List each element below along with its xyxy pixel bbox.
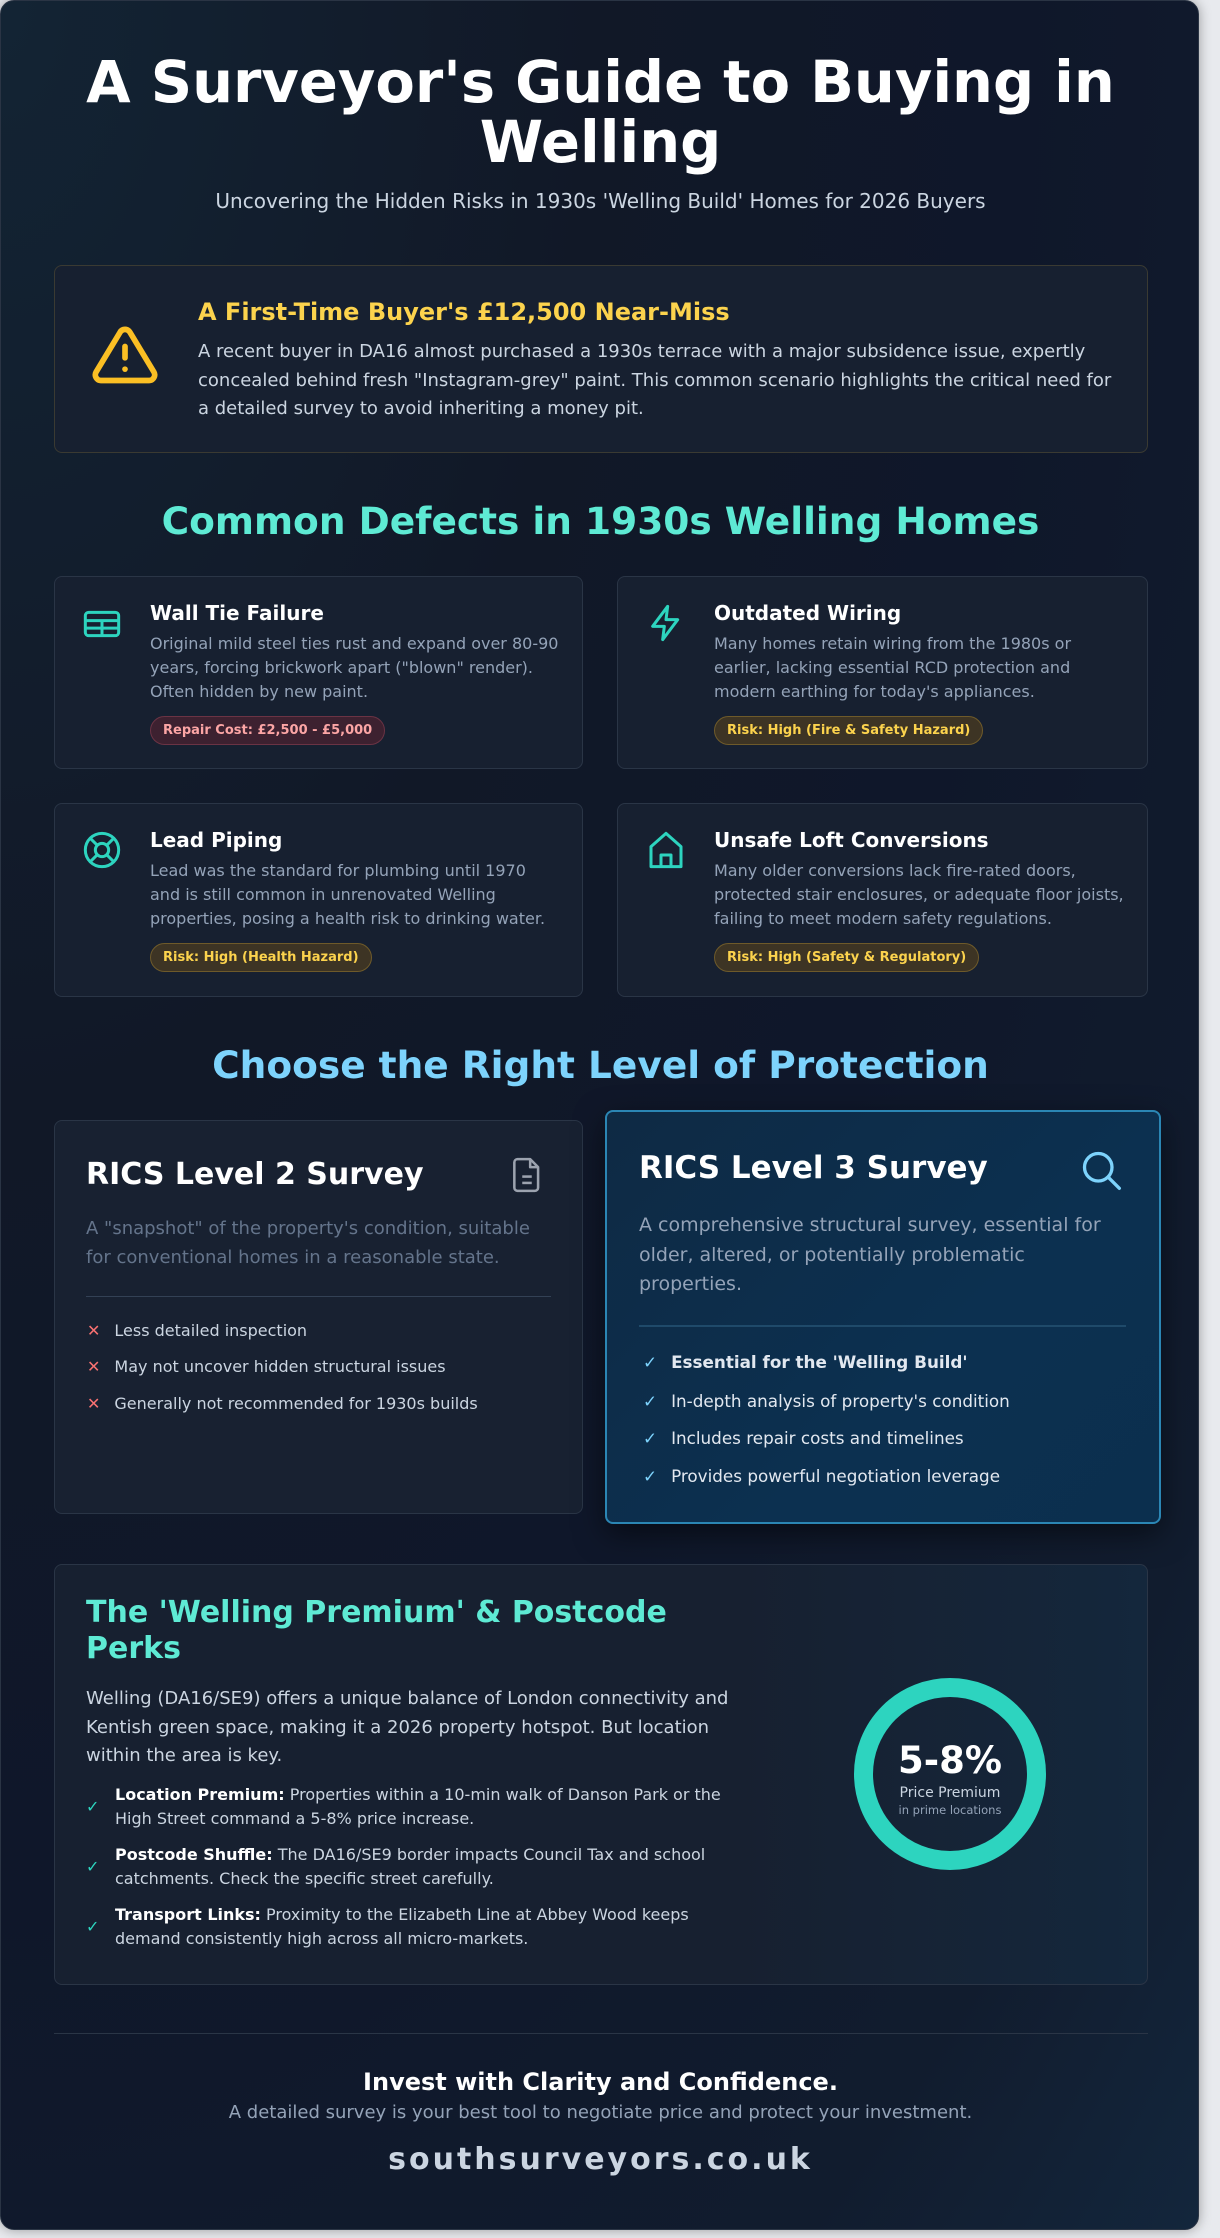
panel: RICS level 2 [54, 1120, 583, 1514]
callout heading: A First-Time Buyer's £12,500 Near-Miss [198, 298, 730, 326]
icon: bricks [84, 610, 120, 638]
premium heading: The 'Welling Premium' & Postcode Perks [86, 1595, 667, 1666]
icon: warning [92, 326, 158, 384]
title: Welling [480, 109, 721, 176]
title: A Surveyor's Guide to Buying in [86, 49, 1115, 116]
panel: lead piping [54, 803, 583, 997]
panel: RICS level 2: A "snapshot" of the property's condition, suitable for conventional homes in a reasonable state. [86, 1218, 530, 1268]
panel: lead piping: Lead was the standard for plumbing until 1970 [150, 861, 526, 880]
panel: outdated wiring: Many homes retain wiring from the 1980s or earlier, lacking essential RCD protection and modern earthing for today's appliances. [714, 634, 1071, 701]
footer text: A detailed survey is your best tool to negotiate price and protect your investment. [229, 2102, 972, 2123]
icon: lightning [651, 604, 680, 642]
panel: wall tie failure [54, 576, 583, 769]
panel: unsafe loft conversions: Risk: High (Safety & Regulatory) [727, 950, 966, 965]
heading: common defects: Common Defects in 1930s Welling Homes [162, 499, 1039, 543]
chart: price premium ring: 5-8% [898, 1739, 1002, 1782]
icon: house [650, 832, 682, 868]
panel: wall tie failure: Repair Cost: £2,500 - £5,000 [163, 723, 372, 738]
footer url: southsurveyors.co.uk [388, 2142, 813, 2177]
panel: RICS level 3 [605, 1110, 1161, 1524]
panel: lead piping: Risk: High (Health Hazard) [163, 950, 359, 965]
panel: outdated wiring: Outdated Wiring [714, 601, 901, 625]
panel: RICS level 3: ✓ In-depth analysis of property's condition [643, 1391, 1010, 1411]
panel: RICS level 2: ✕ May not uncover hidden structural issues [87, 1357, 446, 1376]
panel: unsafe loft conversions: Unsafe Loft Conversions [714, 828, 989, 852]
icon: magnifier [1082, 1152, 1122, 1190]
icon: lifebuoy [84, 832, 120, 868]
panel: RICS level 2: ✕ Less detailed inspection [87, 1321, 307, 1340]
title [86, 49, 1115, 176]
panel: lead piping: and is still common in unrenovated Welling [150, 885, 496, 904]
premium bullets: Location Premium: Properties within a 10-min walk of Danson Park or the High Street command a 5-8% price increase. [115, 1785, 721, 1828]
callout text: A recent buyer in DA16 almost purchased a 1930s terrace with a major subsidence issue, expertly concealed behind fresh "Instagram-grey" paint. This common scenario highlights the critical need for a detailed survey to avoid inheriting a money pit. [198, 341, 1111, 419]
panel: lead piping: properties, posing a health risk to drinking water. [150, 909, 545, 928]
panel: RICS level 2: RICS Level 2 Survey [86, 1157, 424, 1192]
panel: RICS level 3: RICS Level 3 Survey [639, 1150, 988, 1186]
panel: RICS level 2: ✕ Generally not recommended for 1930s builds [87, 1394, 478, 1413]
panel: outdated wiring: Risk: High (Fire & Safety Hazard) [727, 723, 970, 738]
panel: RICS level 3: A comprehensive structural survey, essential for older, altered, or potentially problematic properties. [639, 1214, 1101, 1295]
panel: RICS level 3: ✓ Provides powerful negotiation leverage [643, 1466, 1000, 1486]
footer heading: Invest with Clarity and Confidence. [363, 2068, 838, 2096]
premium bullets: ✓ [86, 1917, 99, 1936]
panel: unsafe loft conversions [617, 803, 1148, 997]
premium bullets: ✓ [86, 1857, 99, 1876]
panel: welling premium [54, 1564, 1148, 1985]
premium bullets: ✓ [86, 1797, 99, 1816]
chart: price premium ring: Price Premium [900, 1785, 1000, 1801]
subtitle: Uncovering the Hidden Risks in 1930s 'Welling Build' Homes for 2026 Buyers [215, 189, 986, 213]
panel: unsafe loft conversions: Many older conversions lack fire-rated doors, protected stair enclosures, or adequate floor joists, failing to meet modern safety regulations. [714, 861, 1124, 928]
premium bullets: Transport Links: Proximity to the Elizabeth Line at Abbey Wood keeps demand consistently high across all micro-markets. [115, 1905, 689, 1948]
panel: RICS level 3: ✓ Includes repair costs and timelines [643, 1428, 964, 1448]
chart: price premium ring: in prime locations [899, 1803, 1001, 1817]
panel: outdated wiring [617, 576, 1148, 769]
panel: wall tie failure: Original mild steel ties rust and expand over 80-90 years, forcing brickwork apart ("blown" render). Often hidden by new paint. [150, 634, 558, 701]
premium bullets: Postcode Shuffle: The DA16/SE9 border impacts Council Tax and school catchments. Check the specific street carefully. [115, 1845, 705, 1888]
icon: document [513, 1158, 540, 1192]
panel: RICS level 3: ✓ Essential for the 'Welling Build' [643, 1352, 968, 1372]
callout: near-miss [54, 265, 1148, 453]
heading: protection: Choose the Right Level of Protection [212, 1043, 989, 1087]
chart: price premium ring [854, 1678, 1046, 1870]
panel: wall tie failure: Wall Tie Failure [150, 601, 324, 625]
premium bullets [86, 1785, 721, 1948]
premium intro: Welling (DA16/SE9) offers a unique balance of London connectivity and Kentish green space, making it a 2026 property hotspot. But location within the area is key. [86, 1688, 728, 1766]
panel: lead piping: Lead Piping [150, 828, 282, 852]
